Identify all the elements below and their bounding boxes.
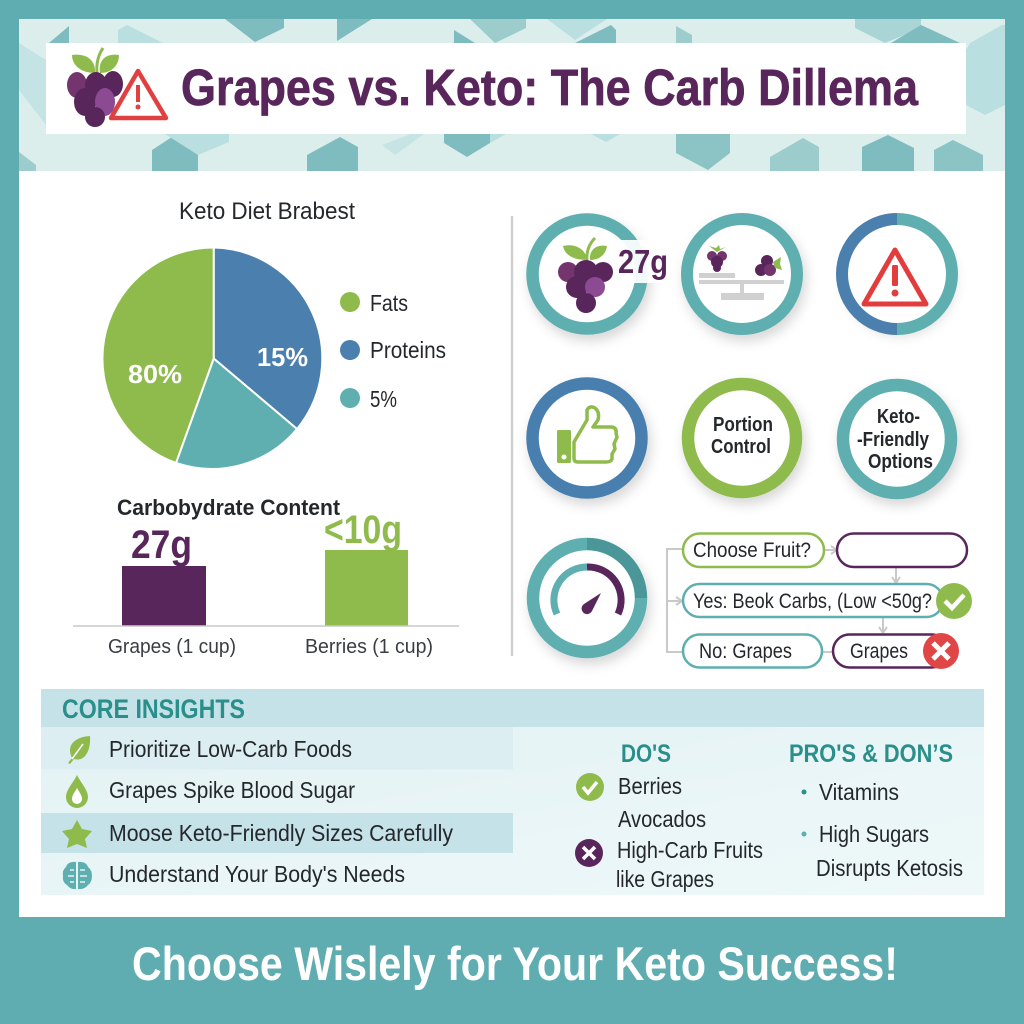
icon: cross — [923, 633, 959, 669]
pie heading: Keto Diet Brabest — [179, 198, 355, 225]
do's column — [575, 740, 763, 892]
bar: grapes: 27g — [131, 523, 192, 567]
bar: grapes: Grapes (1 cup) — [108, 636, 236, 658]
do's column: Avocados — [618, 806, 706, 832]
pie legend: Proteins — [370, 337, 446, 363]
node: grapes: Grapes — [850, 640, 908, 663]
icon: keto-friendly options circle: -Friendly — [857, 429, 930, 451]
do's column: High-Carb Fruits — [617, 837, 763, 863]
panel: core insights — [41, 689, 984, 895]
bar chart heading: Carbobydrate Content — [117, 495, 341, 520]
pro's and don'ts column: High Sugars — [819, 821, 929, 847]
node: choose fruit: Choose Fruit? — [693, 539, 811, 562]
icon: portion control circle: Control — [711, 436, 771, 458]
insight: prioritize low-carb — [41, 727, 513, 770]
icon: check — [936, 583, 972, 619]
pro's and don'ts column: Disrupts Ketosis — [816, 855, 963, 881]
do's column: like Grapes — [616, 866, 714, 892]
node: no — [683, 634, 822, 668]
icon: portion control circle: Portion — [713, 414, 773, 436]
bar: berries: Berries (1 cup) — [305, 636, 433, 658]
icon: gauge circle — [533, 538, 647, 652]
insight: moose keto-friendly: Moose Keto-Friendly Sizes Carefully — [109, 820, 453, 846]
insight: understand body: Understand Your Body's Needs — [109, 861, 405, 887]
footer tagline: Choose Wislely for Your Keto Success! — [132, 937, 898, 990]
do's column: DO'S — [621, 740, 671, 768]
insight: spike blood sugar — [66, 775, 355, 808]
panel: keto diet pie chart — [102, 198, 446, 469]
flowchart — [667, 534, 972, 669]
pie legend: Fats — [370, 290, 408, 316]
pro's and don'ts column: PRO'S & DON’S — [789, 740, 953, 768]
insight: spike blood sugar: Grapes Spike Blood Sugar — [109, 777, 355, 803]
pie chart — [102, 247, 322, 469]
node: yes — [683, 584, 943, 617]
do's column: Berries — [618, 773, 682, 799]
icon: grapes 27g circle — [532, 220, 668, 328]
core insights heading bar — [41, 689, 984, 727]
flowchart connectors — [667, 546, 900, 652]
title text: Grapes vs. Keto: The Carb Dillema — [181, 59, 919, 116]
pie legend — [340, 290, 446, 412]
icon: keto-friendly options circle — [843, 385, 951, 493]
pie labels: 15% — [257, 342, 308, 372]
icon: portion control circle — [688, 384, 796, 492]
pie labels: 80% — [128, 359, 182, 389]
icon: keto-friendly options circle: Options — [868, 451, 933, 473]
node: yes: Yes: Beok Carbs, (Low <50g? — [693, 590, 932, 613]
bar chart: carbohydrate content — [73, 495, 459, 658]
node: grapes — [833, 634, 948, 668]
icon: thumbs up circle — [532, 384, 642, 492]
icon: grapes 27g circle: 27g — [618, 243, 668, 280]
bar: grapes — [108, 523, 236, 658]
pie legend: 5% — [370, 386, 397, 412]
icon: grapes with warning triangle — [67, 48, 166, 127]
pro's and don'ts column: Vitamins — [819, 779, 899, 805]
bar: berries: <10g — [324, 508, 402, 552]
header hexagon pattern — [19, 19, 1005, 171]
node: empty — [837, 534, 967, 567]
icon: keto-friendly options circle: Keto- — [877, 406, 920, 428]
pro's and don'ts column — [789, 740, 963, 881]
insight: moose keto-friendly — [41, 813, 513, 853]
insight: prioritize low-carb: Prioritize Low-Carb Foods — [109, 736, 352, 762]
node: choose fruit — [683, 534, 824, 567]
icon: balance scale circle — [687, 219, 797, 329]
node: no: No: Grapes — [699, 640, 792, 663]
pie labels — [128, 342, 308, 389]
core insights heading bar: CORE INSIGHTS — [62, 694, 245, 724]
title banner — [46, 43, 966, 134]
bar: berries — [305, 508, 433, 658]
icon: warning circle — [836, 213, 958, 335]
